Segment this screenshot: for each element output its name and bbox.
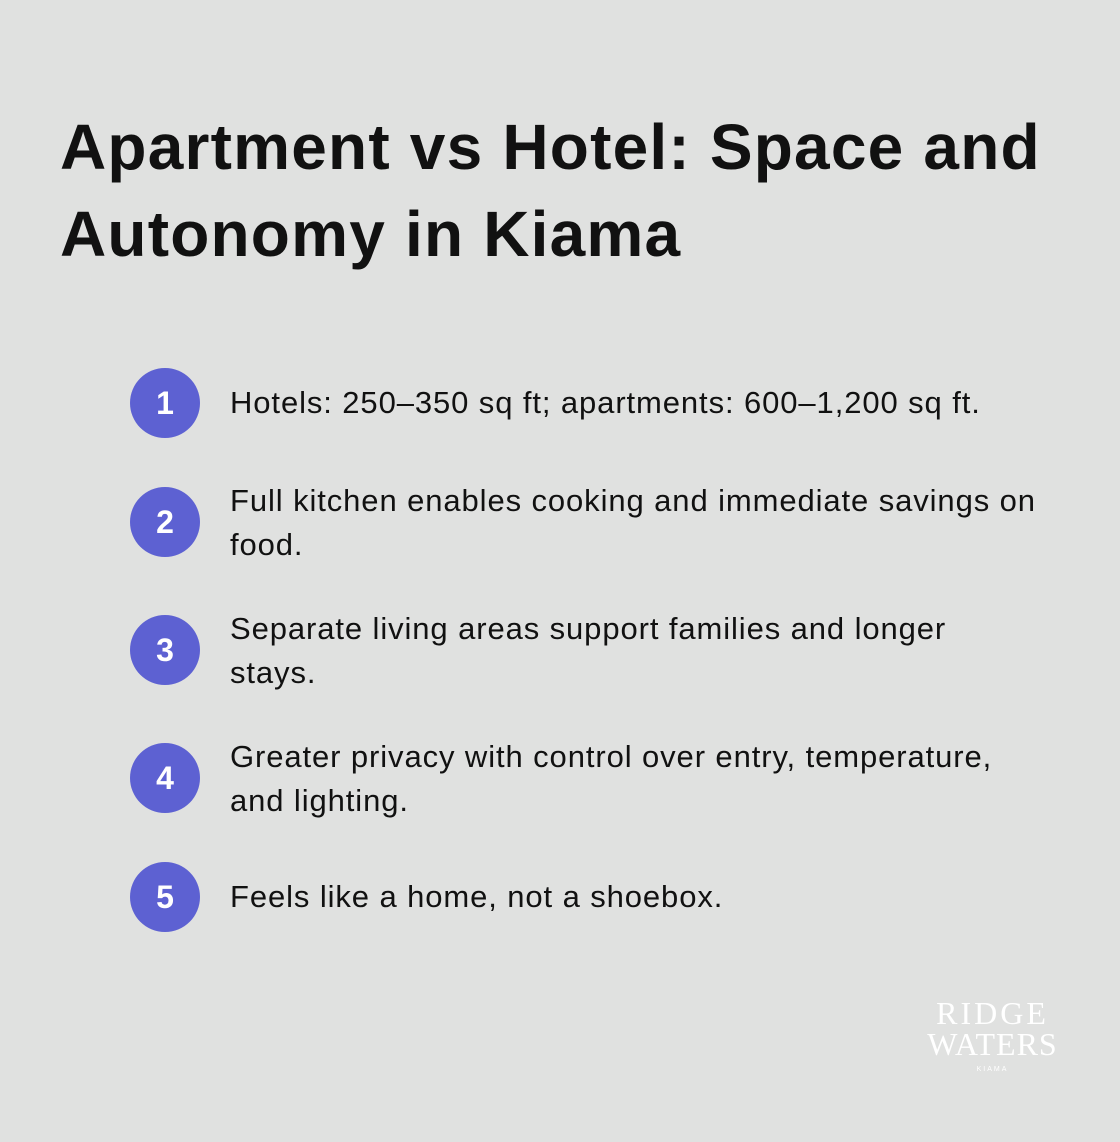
item 3: Separate living areas support families and longer: [230, 611, 946, 646]
item 4: [130, 739, 992, 818]
item 2: [130, 483, 1036, 562]
item 3: [130, 611, 946, 690]
item 1: [130, 368, 981, 438]
item 3: 3: [156, 632, 174, 668]
item 2: Full kitchen enables cooking and immediate savings on: [230, 483, 1036, 518]
logo: RIDGE: [936, 995, 1049, 1031]
title: [60, 111, 1041, 270]
item 4: Greater privacy with control over entry, temperature,: [230, 739, 992, 774]
title: Autonomy in Kiama: [60, 198, 681, 270]
item 5: 5: [156, 879, 174, 915]
item 3: stays.: [230, 655, 316, 690]
item 1: Hotels: 250–350 sq ft; apartments: 600–1,200 sq ft.: [230, 385, 981, 420]
logo: WATERS: [927, 1026, 1058, 1062]
logo: KIAMA: [977, 1066, 1008, 1073]
item 4: and lighting.: [230, 783, 409, 818]
item 2: food.: [230, 527, 303, 562]
item 1: 1: [156, 385, 174, 421]
item 5: Feels like a home, not a shoebox.: [230, 879, 723, 914]
item 5: [130, 862, 723, 932]
item 4: 4: [156, 760, 174, 796]
item 2: 2: [156, 504, 174, 540]
logo: [927, 995, 1058, 1073]
title: Apartment vs Hotel: Space and: [60, 111, 1041, 183]
